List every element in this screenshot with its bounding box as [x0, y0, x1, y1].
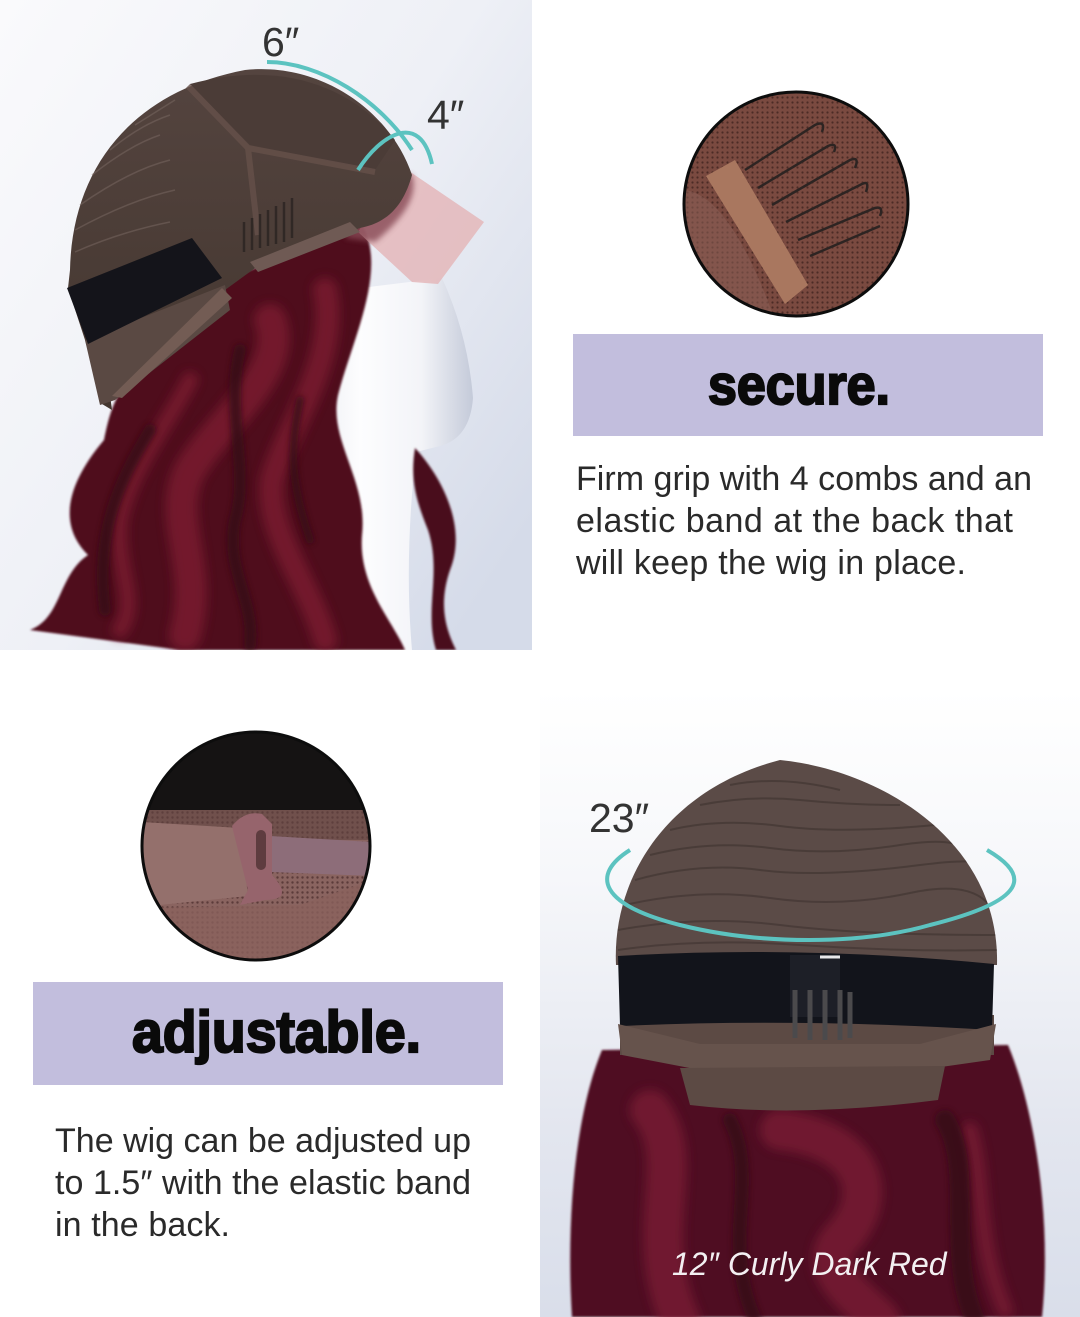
measure ring [607, 850, 1014, 940]
hair mass [30, 225, 405, 650]
text: adjustable description: in the back. [55, 1206, 230, 1244]
text: secure description: Firm grip with 4 combs and an [576, 460, 1032, 498]
text: adjustable description: to 1.5″ with the elastic band [55, 1164, 471, 1202]
comb [795, 990, 850, 1040]
label: 23 inch: 23″ [589, 795, 649, 841]
elastic band [618, 952, 994, 1030]
text: secure description: will keep the wig in place. [575, 544, 966, 582]
text: secure description [575, 460, 1032, 582]
lace front [358, 165, 484, 284]
back cap lower [85, 285, 230, 405]
comb strap [250, 222, 360, 272]
banner: adjustable [33, 982, 503, 1085]
photo: wig side view [0, 0, 532, 650]
circle: comb closeup [684, 92, 908, 320]
circle: adjuster closeup [140, 730, 372, 960]
label: 6 inch: 6″ [262, 19, 299, 65]
mannequin head and neck [336, 282, 473, 650]
text: secure description: elastic band at the back that [576, 502, 1014, 540]
text: adjustable description: The wig can be adjusted up [55, 1122, 471, 1160]
back hair strands [413, 448, 456, 650]
cap lining under band [620, 1015, 994, 1055]
hair [570, 1045, 1045, 1317]
lower strap [618, 1024, 996, 1070]
banner: secure: secure. [708, 353, 890, 416]
wig cap [68, 69, 412, 410]
elastic band [67, 238, 222, 344]
banner: adjustable: adjustable. [132, 1000, 421, 1065]
banner: secure [573, 334, 1043, 436]
text: adjustable description [55, 1122, 471, 1244]
comb [244, 198, 292, 252]
cap [616, 760, 997, 965]
label: 4 inch: 4″ [427, 92, 464, 138]
caption: 12″ Curly Dark Red [672, 1246, 948, 1282]
photo: wig back view [540, 760, 1080, 1317]
measure arcs [267, 62, 412, 150]
